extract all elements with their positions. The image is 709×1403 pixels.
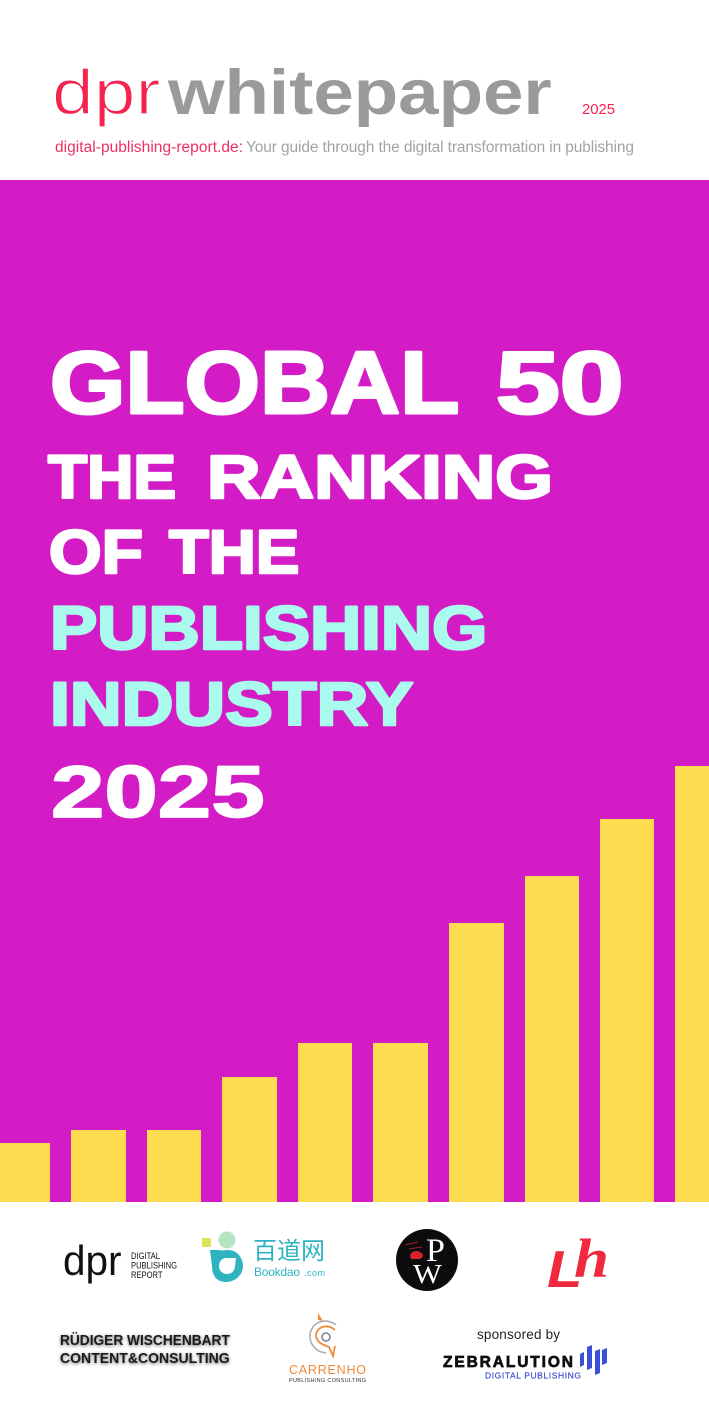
logo: lh: L [547, 1240, 582, 1298]
logo: publishers weekly: W [413, 1260, 443, 1290]
logo: rüdiger wischenbart: CONTENT&CONSULTING [60, 1351, 230, 1367]
logo: sponsored by zebralution: DIGITAL PUBLISHING [485, 1370, 581, 1380]
logo: sponsored by zebralution: sponsored by [477, 1327, 560, 1342]
logo: dpr digital publishing report: REPORT [131, 1269, 163, 1280]
logo: rüdiger wischenbart [60, 1331, 230, 1367]
tagline source: digital-publishing-report.de: [55, 139, 243, 156]
logo: lh [547, 1227, 609, 1298]
logo: rüdiger wischenbart: RÜDIGER WISCHENBART [60, 1331, 230, 1349]
title: of the: THE [169, 519, 299, 587]
tagline: Your guide through the digital transformation in publishing [246, 139, 634, 156]
title: publishing: PUBLISHING [50, 594, 487, 663]
logo: publishers weekly: P [426, 1233, 445, 1269]
bar chart [0, 766, 709, 1202]
logo: publishers weekly [396, 1229, 458, 1291]
logo: bookdao: Bookdao [254, 1265, 300, 1279]
title: of the [49, 518, 299, 587]
header year: 2025 [582, 101, 615, 118]
logo: dpr digital publishing report: PUBLISHING [131, 1260, 177, 1271]
panel: magenta cover [0, 180, 709, 1202]
logo: sponsored by zebralution: ZEBRALUTION [443, 1354, 573, 1371]
logo: carrenho: PUBLISHING CONSULTING [289, 1378, 366, 1384]
logo: bookdao: 百道网 [253, 1238, 325, 1265]
logo: dpr digital publishing report: dpr [63, 1238, 122, 1284]
title: the ranking: RANKING [207, 443, 553, 512]
logo: carrenho: CARRENHO [289, 1363, 366, 1377]
title: of the: OF [49, 518, 143, 586]
header [52, 57, 634, 156]
title: the ranking [48, 443, 553, 512]
title: year 2025: 2025 [51, 752, 265, 833]
logo: bookdao [202, 1232, 325, 1282]
logo: carrenho [289, 1313, 366, 1384]
logo: lh: h [574, 1227, 609, 1289]
title: industry: INDUSTRY [50, 671, 413, 739]
title: global 50: GLOBAL [50, 333, 459, 432]
logo: dpr digital publishing report [63, 1238, 177, 1284]
title: global 50: 50 [496, 334, 624, 432]
logo: sponsored by zebralution [443, 1327, 607, 1380]
header wordmark: dpr: dpr [52, 57, 160, 128]
title: the ranking: THE [48, 443, 176, 512]
header wordmark: whitepaper: whitepaper [167, 58, 552, 128]
title block [48, 333, 624, 833]
logo: dpr digital publishing report: DIGITAL [131, 1250, 160, 1261]
logo: bookdao: .com [304, 1268, 325, 1278]
